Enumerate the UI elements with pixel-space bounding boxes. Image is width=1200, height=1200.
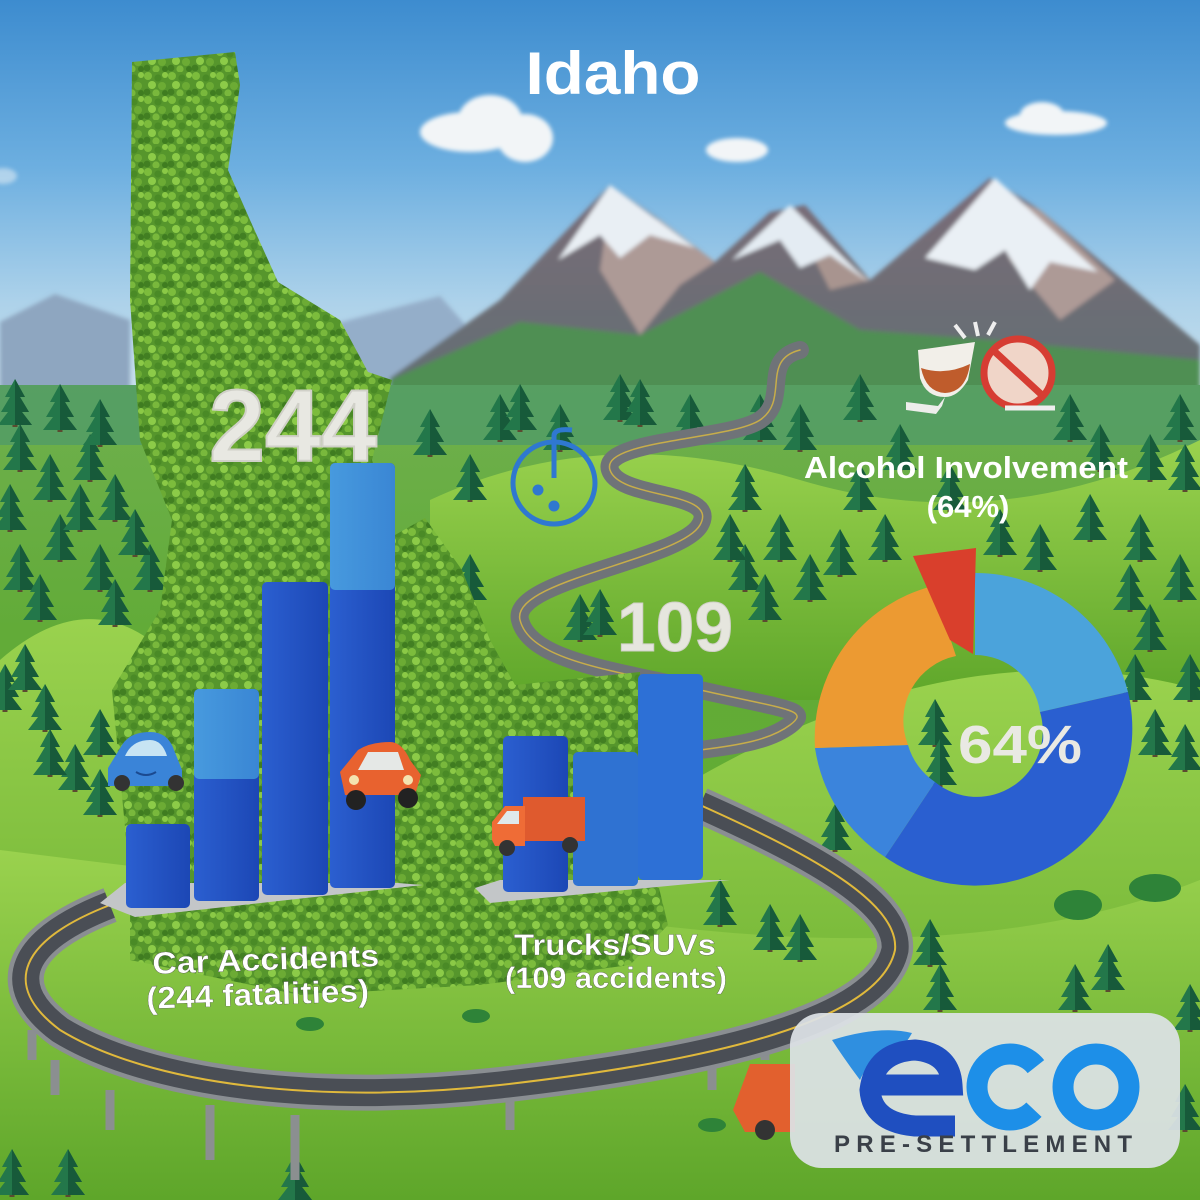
trucks bar chart xyxy=(475,674,730,903)
hills xyxy=(0,440,1200,1200)
donut chart xyxy=(815,548,1132,886)
label: alcohol involvement xyxy=(804,450,1128,524)
road supports xyxy=(32,1025,765,1180)
large road loop xyxy=(26,805,895,1180)
label: car accidents: Car Accidents xyxy=(152,938,380,981)
logo: subtitle: PRE-SETTLEMENT xyxy=(834,1131,1132,1158)
label: alcohol involvement: (64%) xyxy=(927,489,1009,524)
small car bottom xyxy=(733,1064,795,1140)
icon: orange car xyxy=(340,742,421,810)
donut value: 64% xyxy=(958,715,1082,775)
number 244: 244 xyxy=(209,369,377,483)
mountains xyxy=(0,178,1200,440)
icon: truck xyxy=(492,797,585,856)
logo panel xyxy=(790,1013,1180,1168)
clouds xyxy=(0,95,1107,184)
icon: blue car xyxy=(108,732,184,791)
label: trucks/SUVs xyxy=(505,929,727,995)
icon: wine glasses xyxy=(906,322,1055,414)
label: trucks/SUVs: (109 accidents) xyxy=(505,962,727,995)
number 109: 109 xyxy=(617,588,733,666)
label: car accidents xyxy=(146,938,380,1016)
car accidents bar chart xyxy=(100,463,423,917)
winding road xyxy=(520,350,800,750)
label: alcohol involvement: Alcohol Involvement xyxy=(804,450,1128,485)
sky background xyxy=(0,0,1200,420)
state of Idaho hedge xyxy=(112,52,668,995)
label: trucks/SUVs: Trucks/SUVs xyxy=(514,929,716,962)
logo: leaf xyxy=(832,1030,912,1080)
icon: blue wheel symbol xyxy=(513,430,595,524)
title: Idaho xyxy=(526,40,700,107)
ground xyxy=(0,385,1200,1200)
forest xyxy=(0,374,1200,1200)
logo: eco letters xyxy=(870,1050,1129,1126)
label: car accidents: (244 fatalities) xyxy=(146,973,370,1016)
bushes xyxy=(296,874,1181,1132)
